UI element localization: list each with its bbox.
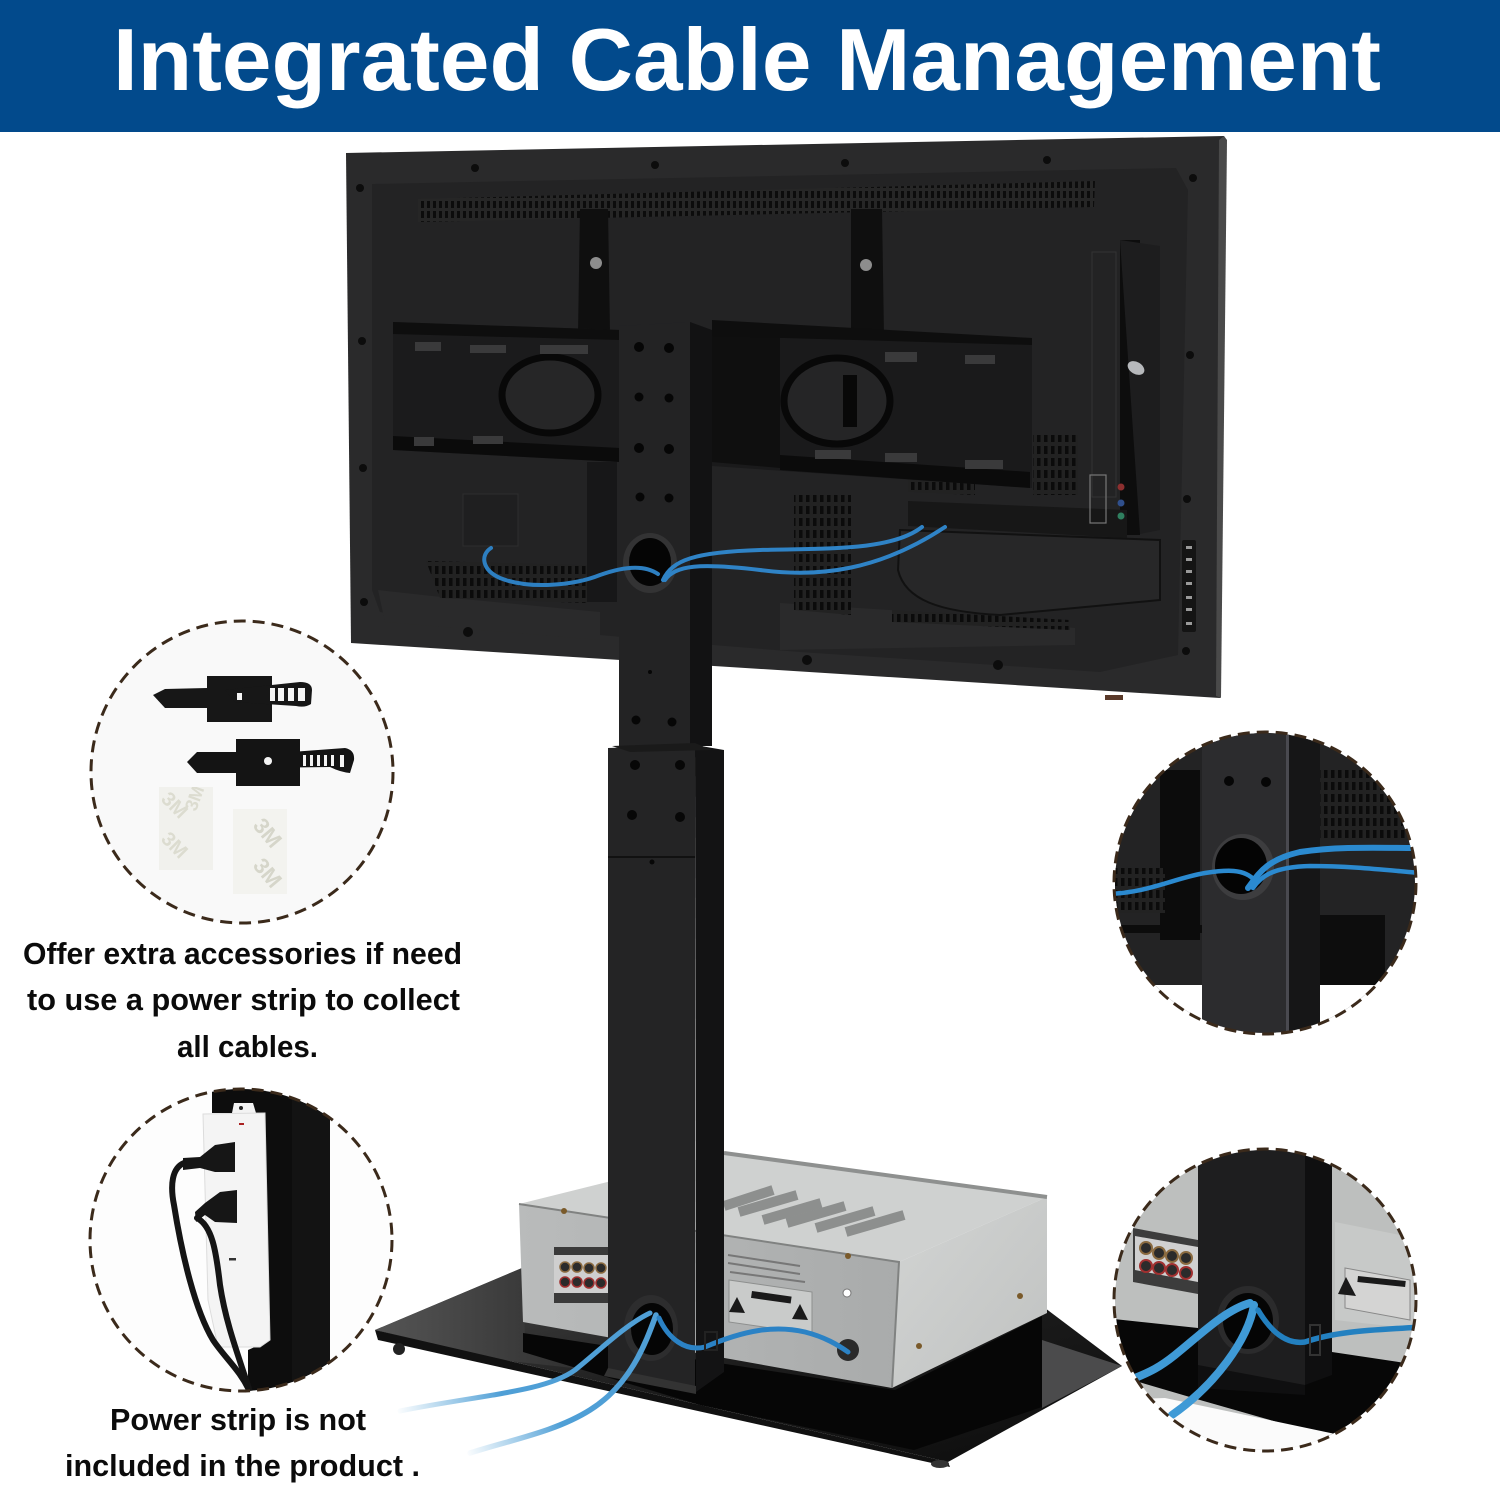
icon: cable tie two [187, 739, 354, 786]
callout: column hole circle [1105, 730, 1425, 1045]
power strip caption [65, 1402, 420, 1483]
icon: plug one [183, 1142, 235, 1172]
icon: plug two [195, 1190, 237, 1223]
title banner [0, 0, 1500, 132]
TV rear [346, 136, 1227, 700]
icon: cable tie one [153, 676, 312, 722]
icon: adhesive pad one: 3M [181, 783, 208, 813]
cords [172, 1163, 250, 1392]
callout: accessories circle [91, 621, 393, 923]
icon: adhesive pad one: 3M [156, 788, 192, 823]
power strip caption: included in the product . [65, 1448, 420, 1483]
accessories caption [23, 936, 462, 1064]
icon: adhesive pad two: 3M [248, 813, 287, 853]
icon: adhesive pad one [156, 783, 213, 870]
title: Integrated Cable Management [113, 10, 1381, 109]
accessories caption: Offer extra accessories if need [23, 936, 462, 971]
TV cables [484, 527, 945, 585]
amplifier on shelf [519, 1153, 1047, 1388]
icon: adhesive pad two [233, 809, 287, 894]
callout: base cable circle [1112, 1148, 1418, 1452]
callout: power strip circle [90, 1088, 392, 1395]
stand column lower [604, 743, 724, 1394]
accessories caption: all cables. [177, 1029, 318, 1064]
VESA mount brackets [393, 209, 1032, 488]
icon: power strip [203, 1103, 270, 1347]
base cables [400, 1313, 848, 1453]
icon: adhesive pad two: 3M [248, 853, 287, 893]
stand column upper [619, 322, 712, 746]
power strip caption: Power strip is not [110, 1402, 366, 1437]
accessories caption: to use a power strip to collect [27, 982, 460, 1017]
glass base [375, 1268, 1122, 1468]
icon: adhesive pad one: 3M [156, 828, 192, 863]
